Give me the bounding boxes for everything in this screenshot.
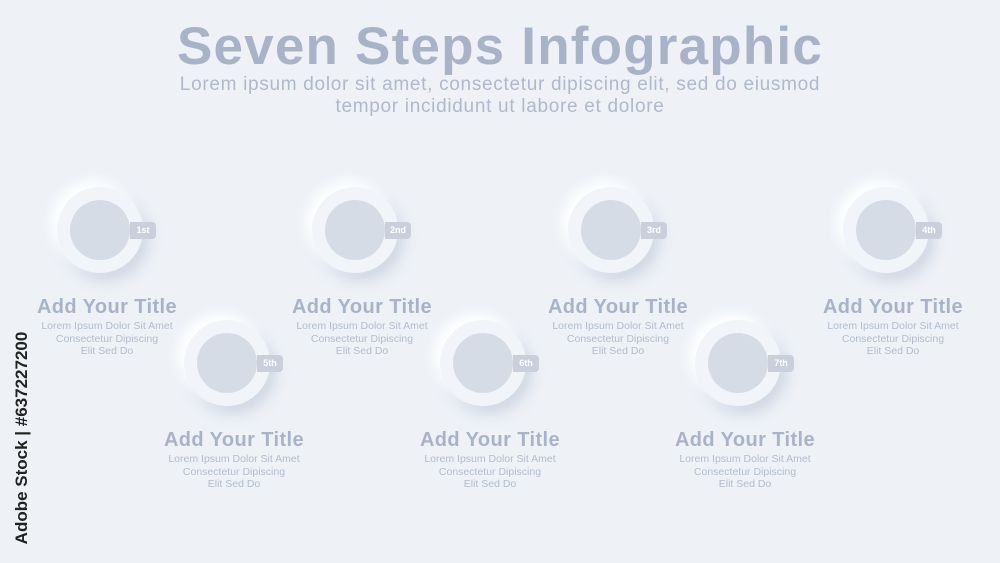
step 2: Add Your Title (292, 296, 432, 318)
step 7: Lorem Ipsum Dolor Sit Amet (679, 453, 811, 465)
step 6: Lorem Ipsum Dolor Sit Amet (424, 453, 556, 465)
watermark id: Adobe Stock | #637227200 (12, 332, 31, 544)
step 4 (823, 182, 963, 357)
subtitle (180, 74, 820, 117)
step 6: Consectetur Dipiscing (439, 466, 541, 478)
step 5: Consectetur Dipiscing (183, 466, 285, 478)
step 1: Add Your Title (37, 296, 177, 318)
step 4: 4th (922, 225, 936, 235)
step 4: Lorem Ipsum Dolor Sit Amet (827, 320, 959, 332)
step 3: Elit Sed Do (592, 345, 644, 357)
step 4: Elit Sed Do (867, 345, 919, 357)
step 3: Lorem Ipsum Dolor Sit Amet (552, 320, 684, 332)
step 7: Elit Sed Do (719, 478, 771, 490)
step 2: Lorem Ipsum Dolor Sit Amet (296, 320, 428, 332)
step 2: Consectetur Dipiscing (311, 332, 413, 344)
step 5 (164, 314, 304, 490)
step 1: 1st (136, 225, 150, 235)
step 6: Elit Sed Do (464, 478, 516, 490)
step 7: 7th (774, 358, 788, 368)
step 6: Add Your Title (420, 429, 560, 451)
step 7: Add Your Title (675, 429, 815, 451)
step 1: Lorem Ipsum Dolor Sit Amet (41, 320, 173, 332)
step 6 (420, 314, 560, 490)
subtitle: tempor incididunt ut labore et dolore (335, 96, 665, 117)
step 5: 5th (263, 358, 277, 368)
step 1: Consectetur Dipiscing (56, 332, 158, 344)
step 4: Consectetur Dipiscing (842, 332, 944, 344)
step 1: Elit Sed Do (81, 345, 133, 357)
subtitle: Lorem ipsum dolor sit amet, consectetur dipiscing elit, sed do eiusmod (180, 74, 820, 95)
step 1 (37, 182, 177, 357)
step 4: Add Your Title (823, 296, 963, 318)
step 3: Consectetur Dipiscing (567, 332, 669, 344)
step 6: 6th (519, 358, 533, 368)
step 5: Lorem Ipsum Dolor Sit Amet (168, 453, 300, 465)
step 5: Elit Sed Do (208, 478, 260, 490)
step 2: 2nd (390, 225, 406, 235)
title: Seven Steps Infographic (177, 17, 823, 76)
step 3: 3rd (647, 225, 661, 235)
step 3: Add Your Title (548, 296, 688, 318)
step 2 (292, 182, 432, 357)
step 7 (675, 314, 815, 490)
step 7: Consectetur Dipiscing (694, 466, 796, 478)
step 3 (548, 182, 688, 357)
step 2: Elit Sed Do (336, 345, 388, 357)
step 5: Add Your Title (164, 429, 304, 451)
